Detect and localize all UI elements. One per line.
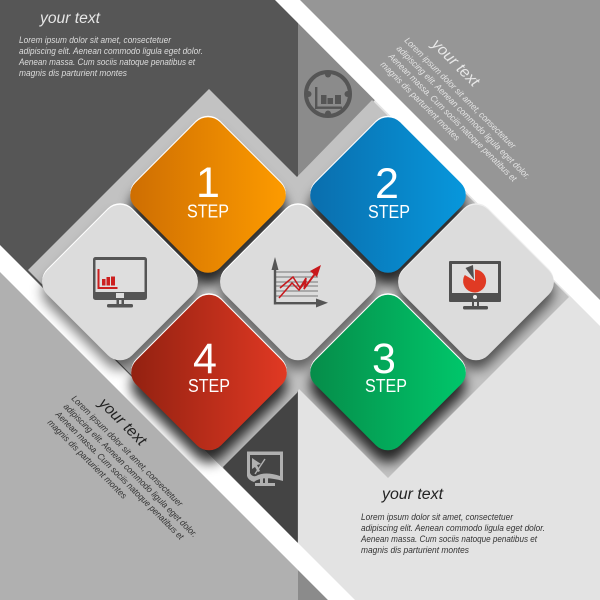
panel: step 4 red diamond (124, 286, 294, 457)
body text top-left: magnis dis parturient montes (19, 68, 127, 78)
panel: central diamond backdrop (28, 89, 569, 478)
body text top-right: Lorem ipsum dolor sit amet, consectetuer (403, 35, 518, 151)
text block: top-left (18, 10, 203, 78)
icon: monitor with pie chart (449, 261, 501, 310)
heading: your text bottom-left: your text (94, 394, 150, 450)
panel: grey bottom-middle triangle (298, 570, 328, 600)
body text bottom-right (360, 512, 545, 555)
body text top-right: Aenean massa. Cum sociis natoque penatibus et (386, 51, 519, 184)
panel: left grey diamond with monitor (35, 196, 205, 367)
panel: centre grey diamond with growth chart (213, 196, 383, 367)
text block: bottom-right (360, 486, 545, 555)
body text top-right: adipiscing elit. Aenean commodo ligula eget dolor. (395, 43, 532, 181)
heading: your text bottom-right: your text (381, 486, 444, 503)
icon: target with bar chart (306, 72, 350, 116)
panel: step 1 orange diamond (123, 109, 293, 280)
panel: dark top-left background (0, 0, 298, 600)
icon: monitor with red bar chart (93, 257, 147, 308)
text block: top-right rotated (379, 35, 532, 184)
number 3: 3 (372, 335, 396, 383)
body text bottom-right: magnis dis parturient montes (361, 545, 469, 555)
diamond shadows (34, 186, 562, 472)
panel: white diagonal strip top-right (275, 0, 600, 326)
panel: grey bottom-left background (0, 270, 328, 600)
panel: grey top-right background (298, 0, 600, 305)
body text bottom-right: Lorem ipsum dolor sit amet, consectetuer (361, 512, 514, 522)
number 1: 1 (196, 159, 220, 207)
text block: bottom-left rotated (46, 393, 199, 542)
panel: right grey diamond with pie monitor (391, 196, 561, 367)
body text bottom-right: adipiscing elit. Aenean commodo ligula eget dolor. (361, 523, 545, 533)
body text top-left (18, 35, 203, 78)
panel: step 3 green diamond (303, 286, 473, 457)
body text bottom-left: Lorem ipsum dolor sit amet, consectetuer (70, 393, 185, 509)
panel: light bottom-right background (298, 20, 600, 600)
label step 4: STEP (188, 376, 230, 396)
panel: darker grey top-middle wedge (298, 22, 375, 176)
number 4: 4 (193, 335, 217, 383)
heading: your text top-right: your text (427, 35, 483, 91)
heading: your text top-left: your text (39, 10, 101, 27)
body text top-right: magnis dis parturient montes (379, 59, 462, 143)
label step 2: STEP (368, 202, 410, 222)
icon: growth chart (272, 257, 328, 308)
panel: step 2 blue diamond (303, 109, 473, 280)
body text bottom-right: Aenean massa. Cum sociis natoque penatibus et (360, 534, 537, 544)
body text bottom-left: magnis dis parturient montes (46, 417, 129, 501)
body text top-left: Aenean massa. Cum sociis natoque penatibus et (18, 57, 195, 67)
number 2: 2 (375, 160, 399, 208)
panel: dark bottom-middle wedge (223, 393, 297, 542)
body text bottom-left: Aenean massa. Cum sociis natoque penatibus et (53, 409, 186, 542)
body text top-left: Lorem ipsum dolor sit amet, consectetuer (19, 35, 172, 45)
body text bottom-left: adipiscing elit. Aenean commodo ligula eget dolor. (62, 401, 199, 539)
label step 1: STEP (187, 202, 229, 222)
label step 3: STEP (365, 376, 407, 396)
panel: white diagonal strip bottom-left (0, 245, 355, 600)
body text top-left: adipiscing elit. Aenean commodo ligula eget dolor. (19, 46, 203, 56)
icon: curved monitor with cursor (247, 452, 283, 486)
